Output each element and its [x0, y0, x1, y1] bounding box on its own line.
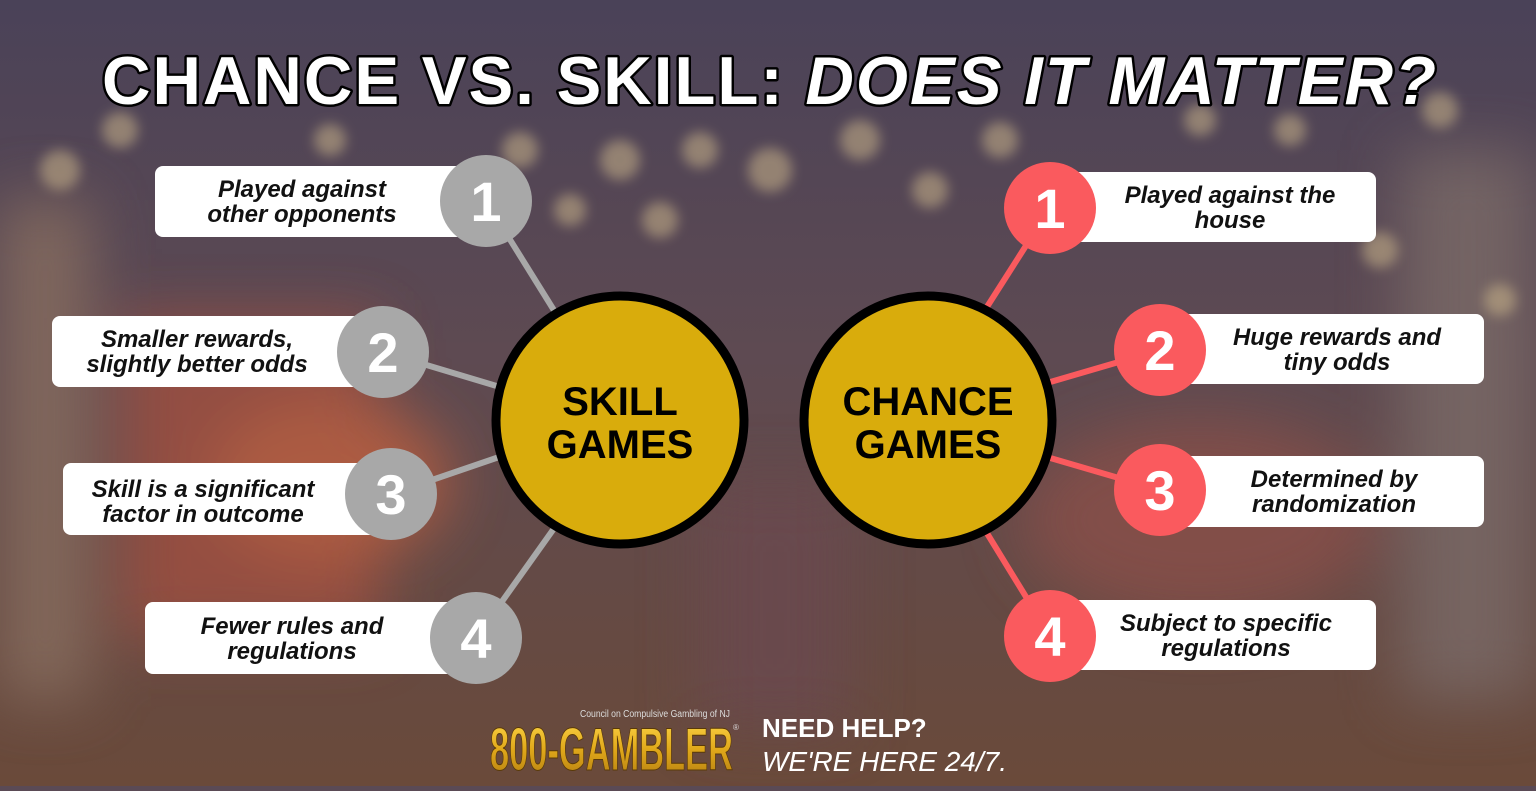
skill item 1: Played against — [218, 176, 387, 203]
connector lines chance — [985, 208, 1160, 636]
skill item 3: 3 — [375, 463, 407, 526]
chance item 2: tiny odds — [1284, 349, 1390, 376]
chance games circle: CHANCE — [842, 380, 1014, 424]
logo 800-GAMBLER: ® — [733, 723, 739, 732]
skill item 4 — [145, 592, 522, 684]
skill item 1: other opponents — [207, 201, 397, 228]
chance item 4: regulations — [1161, 635, 1291, 662]
chance item 2 — [1114, 304, 1484, 396]
chance item 2: 2 — [1144, 319, 1176, 382]
skill item 3 — [63, 448, 437, 540]
skill games circle — [496, 296, 744, 544]
skill item 2 — [52, 306, 429, 398]
chance item 2: Huge rewards and — [1233, 324, 1442, 351]
skill item 2: slightly better odds — [86, 351, 308, 378]
logo 800-GAMBLER: 800-GAMBLER — [490, 716, 733, 783]
chance item 4: Subject to specific — [1120, 610, 1332, 637]
chance item 1: house — [1195, 207, 1265, 234]
chance item 1: Played against the — [1125, 182, 1335, 209]
skill item 2: 2 — [367, 321, 399, 384]
chance item 3: Determined by — [1251, 466, 1419, 493]
connector lines skill — [383, 201, 560, 638]
need help text: WE'RE HERE 24/7. — [762, 746, 1007, 777]
skill games circle: GAMES — [547, 423, 693, 467]
chance item 3: 3 — [1144, 459, 1176, 522]
skill item 3: factor in outcome — [102, 501, 304, 528]
chance games circle — [804, 296, 1052, 544]
chance item 1: 1 — [1034, 177, 1066, 240]
skill item 4: Fewer rules and — [201, 613, 385, 640]
skill item 4: 4 — [460, 607, 492, 670]
chance item 4: 4 — [1034, 605, 1066, 668]
need help text — [762, 713, 1007, 777]
chance item 3: randomization — [1252, 491, 1416, 518]
need help text: NEED HELP? — [762, 713, 927, 743]
skill item 1 — [155, 155, 532, 247]
chance item 4 — [1004, 590, 1376, 682]
skill item 1: 1 — [470, 170, 502, 233]
logo 800-GAMBLER: Council on Compulsive Gambling of NJ — [580, 709, 730, 720]
skill item 2: Smaller rewards, — [101, 326, 293, 353]
chance item 3 — [1114, 444, 1484, 536]
chance item 1 — [1004, 162, 1376, 254]
logo 800-GAMBLER — [490, 709, 739, 783]
skill games circle: SKILL — [562, 380, 678, 424]
title: CHANCE VS. SKILL: DOES IT MATTER? — [102, 43, 1438, 119]
skill item 4: regulations — [227, 638, 357, 665]
skill item 3: Skill is a significant — [92, 476, 315, 503]
chance games circle: GAMES — [855, 423, 1001, 467]
